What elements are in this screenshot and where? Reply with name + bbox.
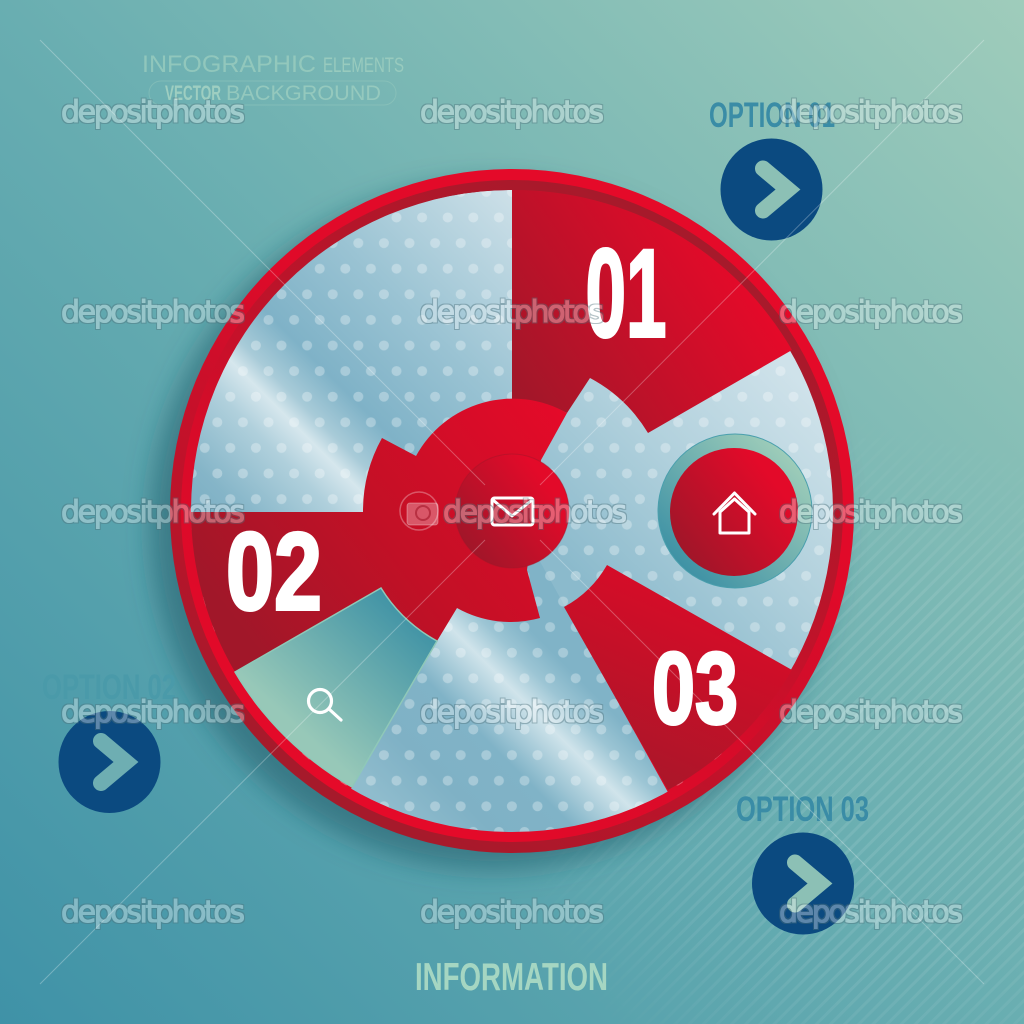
number 01: 01 (586, 224, 666, 364)
icon: house (714, 493, 755, 533)
watermarks: depositphotos (443, 495, 627, 530)
segment 02 and centre gear (191, 399, 567, 672)
segment 03 (564, 565, 792, 790)
main wheel (170, 169, 900, 877)
icon: envelope (492, 498, 533, 525)
title block: INFOGRAPHIC (142, 51, 316, 78)
watermarks: depositphotos (420, 95, 604, 130)
option 01 (709, 96, 835, 240)
option 02: OPTION 02 (42, 668, 176, 707)
teal search segment (235, 588, 437, 787)
watermarks: depositphotos (779, 495, 963, 530)
watermarks: depositphotos (779, 895, 963, 930)
option 03 (736, 790, 869, 934)
title block: BACKGROUND (226, 82, 381, 105)
watermarks: depositphotos (779, 695, 963, 730)
home button (658, 434, 812, 588)
title block (142, 51, 404, 105)
number 03: 03 (652, 632, 738, 746)
icon: magnifier (308, 690, 341, 720)
watermarks: depositphotos (779, 295, 963, 330)
watermarks: depositphotos (779, 95, 963, 130)
segment 01 (512, 190, 792, 433)
watermarks: depositphotos (420, 695, 604, 730)
option 01: OPTION 01 (709, 96, 835, 135)
title block: VECTOR (165, 82, 221, 105)
watermarks: depositphotos (61, 495, 245, 530)
watermark camera logo (400, 492, 438, 530)
inner red ring (181, 180, 843, 842)
number 02: 02 (226, 510, 322, 634)
watermarks: depositphotos (420, 895, 604, 930)
title block: ELEMENTS (323, 54, 404, 77)
light disk with dots (191, 190, 833, 832)
option 03: OPTION 03 (736, 790, 869, 829)
disk drop shadow (150, 182, 838, 870)
watermarks: depositphotos (61, 895, 245, 930)
centre circle (455, 454, 569, 568)
watermarks: depositphotos (61, 295, 245, 330)
watermarks: depositphotos (420, 295, 604, 330)
footer label: INFORMATION (415, 956, 608, 999)
watermarks: depositphotos (61, 695, 245, 730)
watermarks: depositphotos (61, 95, 245, 130)
watermarks (61, 95, 963, 930)
option 02 (42, 668, 176, 813)
outer red ring (170, 169, 854, 853)
